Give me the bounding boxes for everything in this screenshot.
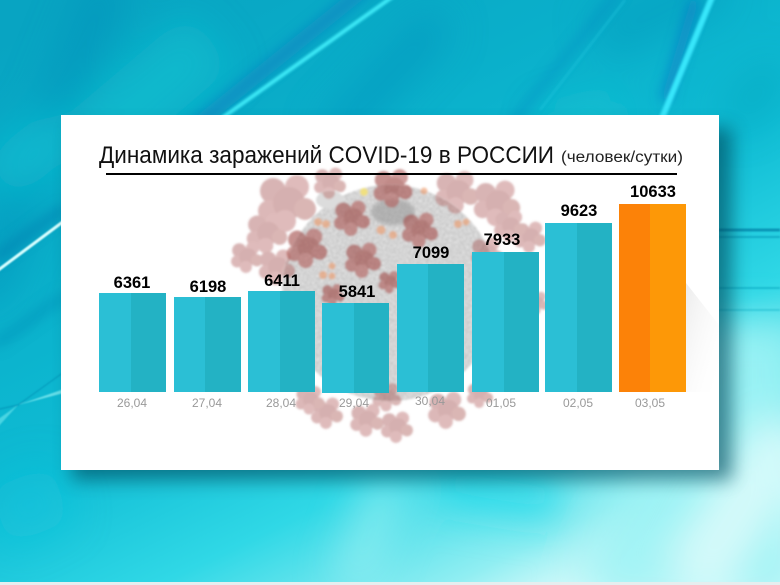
panel shadow xyxy=(72,128,732,480)
virus illustration behind the chart xyxy=(231,168,549,443)
bar 01,05: 01,05 xyxy=(486,396,516,410)
bar 03,05 highlighted: 03,05 xyxy=(635,396,665,410)
title underline xyxy=(106,173,677,175)
bar 30,04: 30,04 xyxy=(415,394,445,408)
bar 29,04: 29,04 xyxy=(339,396,369,410)
bar 30,04: 7099 xyxy=(413,244,449,262)
bar 30,04 xyxy=(397,244,464,408)
bar 02,05 xyxy=(545,202,612,410)
bar 02,05: 02,05 xyxy=(563,396,593,410)
title: Динамика заражений COVID-19 в РОССИИ xyxy=(99,142,554,169)
bar 03,05 highlighted: 10633 xyxy=(630,183,676,201)
bar 26,04: 26,04 xyxy=(117,396,147,410)
bar 26,04 xyxy=(99,274,166,410)
right horizontal bands xyxy=(719,230,780,310)
left bright streak xyxy=(0,221,64,271)
title: (человек/сутки) xyxy=(561,149,683,166)
left light burst xyxy=(0,372,64,428)
bar chart xyxy=(99,183,686,410)
bar 01,05: 7933 xyxy=(484,231,520,249)
faint diagonal shadow right of the last bar xyxy=(686,283,719,392)
bar 28,04: 28,04 xyxy=(266,396,296,410)
bar 28,04 xyxy=(248,272,315,410)
bar 26,04: 6361 xyxy=(114,274,150,292)
bar 27,04: 27,04 xyxy=(192,396,222,410)
white panel xyxy=(61,115,719,470)
bar 27,04 xyxy=(174,278,241,410)
bar 27,04: 6198 xyxy=(190,278,226,296)
bar 29,04: 5841 xyxy=(339,283,375,301)
bar 02,05: 9623 xyxy=(561,202,597,220)
bar 28,04: 6411 xyxy=(264,272,300,290)
bar 29,04 xyxy=(322,283,389,410)
bar 03,05 highlighted xyxy=(619,183,686,410)
bar 01,05 xyxy=(472,231,539,410)
strip at the bottom edge xyxy=(0,582,780,585)
